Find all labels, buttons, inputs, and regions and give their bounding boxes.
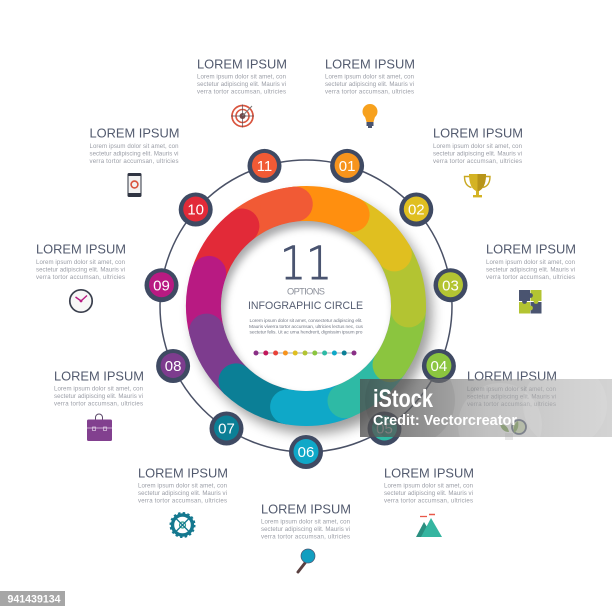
text block 10 [90, 126, 180, 165]
node 04 [422, 349, 456, 383]
text block 08: LOREM IPSUM [54, 369, 144, 384]
text block 01 [325, 57, 415, 96]
text block 11: LOREM IPSUM [197, 57, 287, 72]
text block 09: sectetur adipiscing elit. Mauris vi [36, 266, 125, 274]
watermark brand: iStock [373, 385, 433, 413]
text block 03: LOREM IPSUM [486, 242, 576, 257]
node 01: 01 [339, 158, 355, 175]
text block 10: sectetur adipiscing elit. Mauris vi [90, 150, 178, 158]
node 04: 04 [431, 358, 447, 375]
text block 01: verra tortor accumsan, ultricies [325, 88, 414, 96]
text block 07: verra tortor accumsan, ultricies [138, 498, 227, 504]
image id badge: 941439134 [8, 594, 61, 606]
text block 04 [467, 369, 557, 408]
text block 10: LOREM IPSUM [90, 126, 180, 141]
text block 05: Lorem ipsum dolor sit amet, con [384, 482, 473, 490]
node 03 [434, 268, 468, 302]
text block 04: Lorem ipsum dolor sit amet, con [467, 386, 556, 393]
text block 04: verra tortor accumsan, ultricies [467, 401, 556, 408]
text block 02: sectetur adipiscing elit. Mauris vi [433, 150, 522, 158]
text block 11: Lorem ipsum dolor sit amet, con [197, 74, 286, 80]
center white disc [221, 221, 394, 397]
icon: trophy [464, 174, 490, 197]
text block 11: verra tortor accumsan, ultricies [197, 88, 286, 96]
node 05 [368, 412, 402, 446]
icon: target [231, 104, 254, 128]
text block 09: verra tortor accumsan, ultricies [36, 274, 125, 281]
text block 09: LOREM IPSUM [36, 242, 126, 257]
text block 11: sectetur adipiscing elit. Mauris vi [197, 81, 286, 88]
center body text: Mauris viverra tortor accumsan, ultricies lectus nec, cus [249, 324, 364, 330]
text block 07: LOREM IPSUM [138, 466, 228, 481]
text block 02 [433, 126, 523, 165]
node 02: 02 [408, 202, 425, 219]
center body text: Lorem ipsum dolor sit amet, consectetur adipiscing elit. [250, 318, 362, 324]
text block 02: verra tortor accumsan, ultricies [433, 158, 522, 165]
icon: gear [170, 513, 194, 537]
text block 05: LOREM IPSUM [384, 466, 474, 481]
color dot row [254, 350, 356, 356]
center body text: sectetur felis. Ut ac urna hendrerit, dignissim ipsum pro [250, 330, 363, 336]
node 03: 03 [442, 277, 459, 294]
node 06 [289, 435, 323, 469]
icon: light bulb [362, 104, 378, 128]
node 02 [399, 192, 433, 226]
text block 04: LOREM IPSUM [467, 369, 557, 384]
outer thin orbit circle [160, 160, 452, 452]
node 06: 06 [298, 444, 314, 461]
node 07: 07 [218, 421, 235, 438]
node 09 [144, 268, 178, 302]
text block 03: Lorem ipsum dolor sit amet, con [486, 259, 575, 266]
text block 10: Lorem ipsum dolor sit amet, con [90, 143, 178, 150]
node 07 [210, 412, 244, 446]
text block 03: sectetur adipiscing elit. Mauris vi [486, 266, 575, 274]
text block 08 [54, 369, 144, 408]
icon: magnifier [298, 549, 315, 572]
text block 07: Lorem ipsum dolor sit amet, con [138, 482, 227, 490]
icon: puzzle [519, 290, 542, 314]
text block 11 [197, 57, 287, 96]
text block 03: verra tortor accumsan, ultricies [486, 274, 575, 281]
node 01 [330, 149, 364, 183]
center number: 11 [280, 237, 332, 290]
node 05: 05 [376, 421, 393, 438]
text block 06: sectetur adipiscing elit. Mauris vi [261, 526, 350, 533]
icon: plant [500, 420, 526, 440]
node 08 [156, 349, 190, 383]
center body text [249, 318, 364, 336]
central colored ring [192, 194, 432, 434]
watermark credit: Credit: Vectorcreator [373, 413, 517, 429]
text block 08: verra tortor accumsan, ultricies [54, 400, 143, 408]
text block 01: sectetur adipiscing elit. Mauris vi [325, 81, 414, 88]
text block 09: Lorem ipsum dolor sit amet, con [36, 259, 125, 266]
text block 06: LOREM IPSUM [261, 502, 351, 517]
text block 08: sectetur adipiscing elit. Mauris vi [54, 393, 143, 400]
text block 07 [138, 466, 228, 504]
text block 05 [384, 466, 474, 504]
text block 02: LOREM IPSUM [433, 126, 523, 141]
text block 03 [486, 242, 576, 281]
text block 06: verra tortor accumsan, ultricies [261, 534, 350, 540]
node 10 [179, 192, 213, 226]
text block 01: LOREM IPSUM [325, 57, 415, 72]
node 11: 11 [257, 158, 272, 175]
text block 09 [36, 242, 126, 281]
image id badge [0, 591, 65, 606]
icon: smartphone [128, 173, 142, 197]
icon: clock [70, 290, 92, 312]
node 10: 10 [187, 202, 204, 219]
text block 06 [261, 502, 351, 540]
text block 05: sectetur adipiscing elit. Mauris vi [384, 490, 473, 497]
text block 05: verra tortor accumsan, ultricies [384, 498, 473, 504]
text block 04: sectetur adipiscing elit. Mauris vi [467, 394, 556, 400]
icon: briefcase [87, 414, 112, 441]
text block 08: Lorem ipsum dolor sit amet, con [54, 386, 143, 392]
node 08: 08 [165, 358, 181, 375]
watermark band [360, 379, 612, 437]
text block 07: sectetur adipiscing elit. Mauris vi [138, 490, 227, 497]
text block 06: Lorem ipsum dolor sit amet, con [261, 518, 350, 526]
center heading: INFOGRAPHIC CIRCLE [248, 300, 363, 312]
node 11 [248, 149, 282, 183]
text block 10: verra tortor accumsan, ultricies [90, 158, 178, 165]
node 09: 09 [153, 277, 170, 294]
text block 01: Lorem ipsum dolor sit amet, con [325, 74, 414, 80]
text block 02: Lorem ipsum dolor sit amet, con [433, 143, 522, 150]
options label: OPTIONS [287, 286, 325, 296]
icon: mountains [416, 514, 442, 537]
